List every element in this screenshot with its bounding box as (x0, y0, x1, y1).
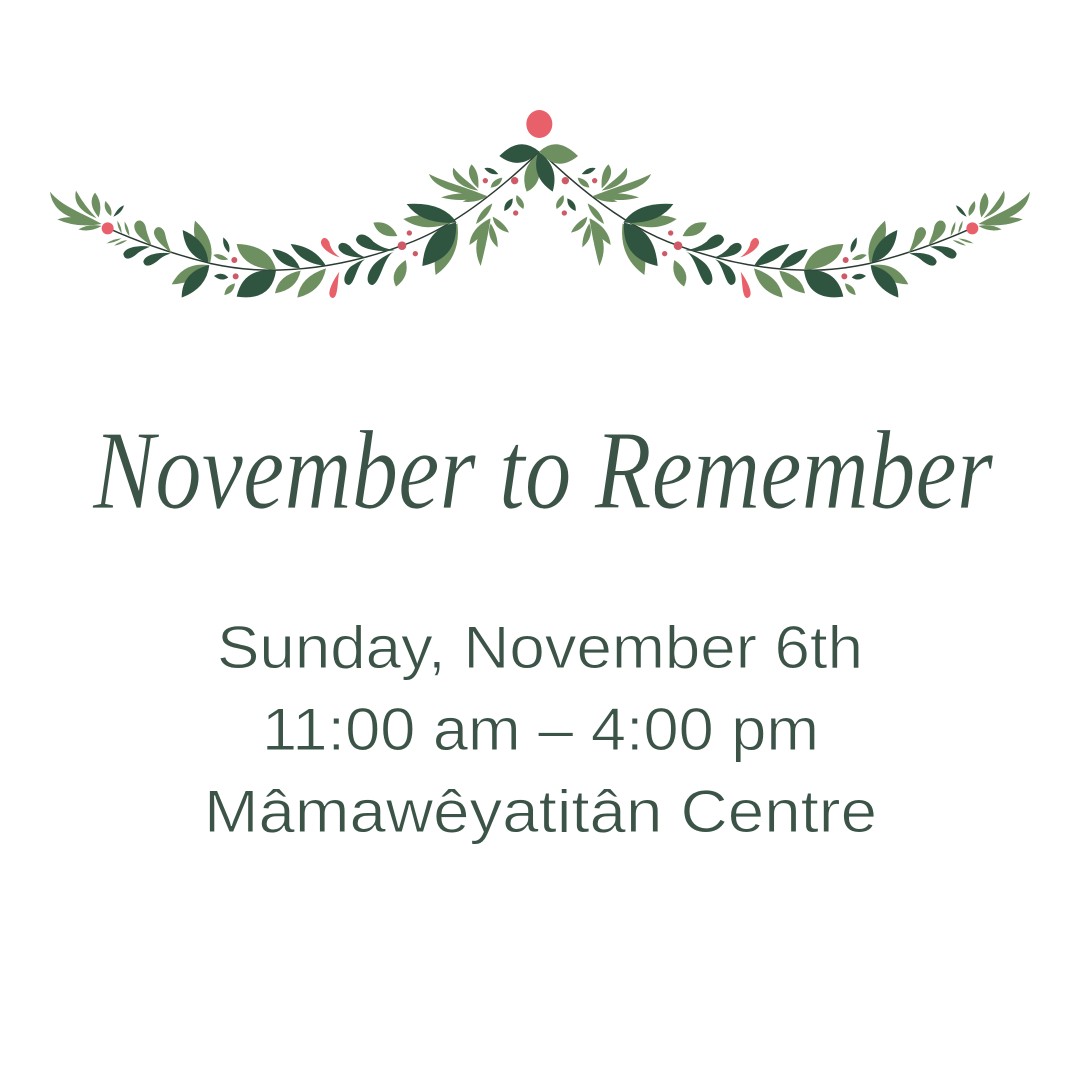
garland (50, 110, 1030, 298)
venue: Mâmawêyatitân Centre (204, 778, 877, 845)
garland: right half (541, 152, 1030, 298)
garland: centre leaves and red berry (499, 110, 578, 192)
time: 11:00 am – 4:00 pm (262, 696, 819, 763)
garland: left half (50, 152, 539, 298)
event details (204, 614, 877, 845)
date: Sunday, November 6th (217, 614, 863, 681)
